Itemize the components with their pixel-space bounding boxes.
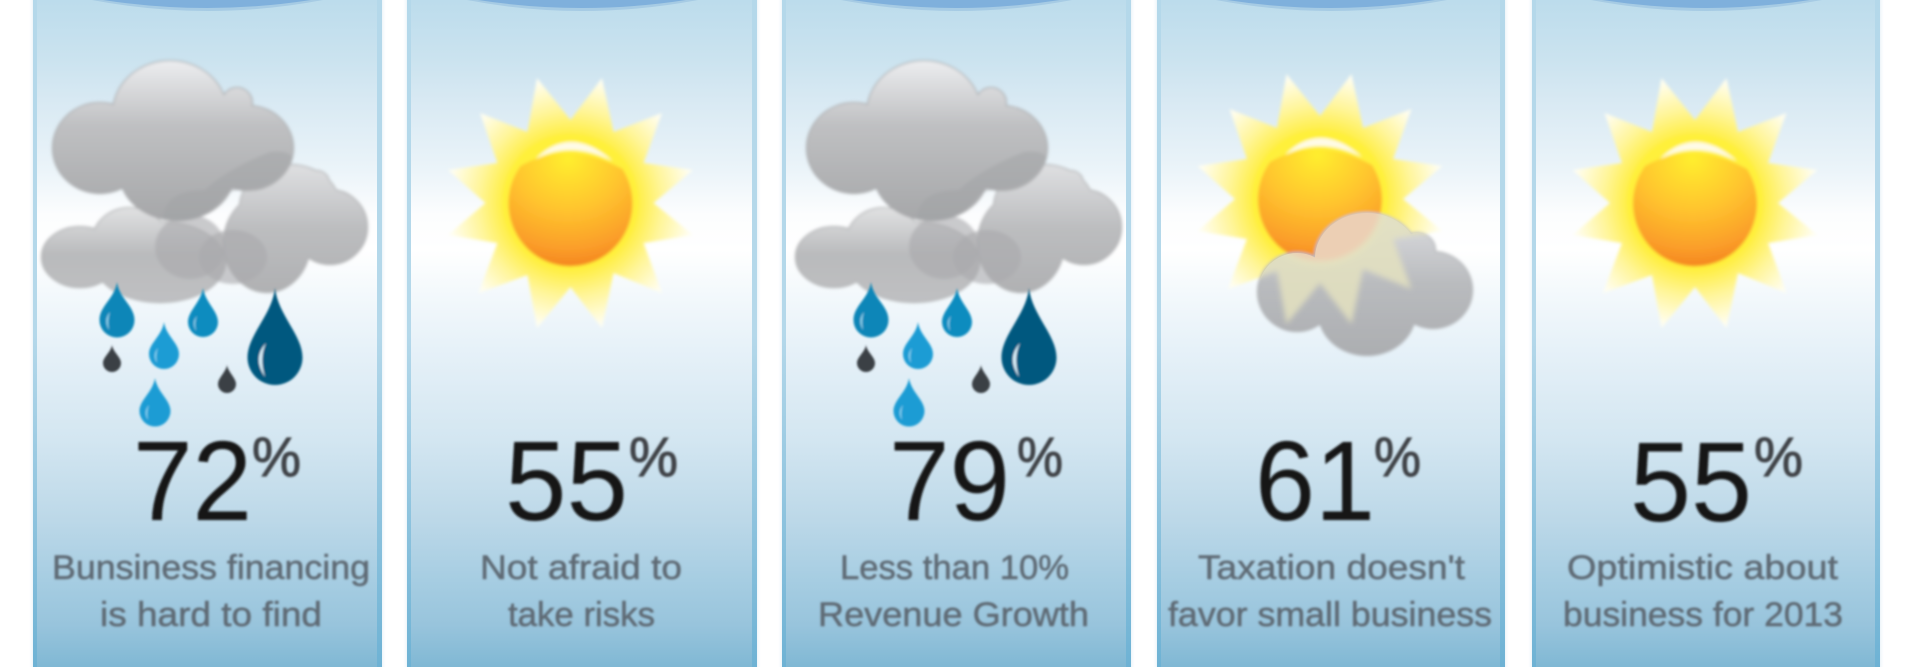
caption: Taxation doesn't	[1198, 549, 1466, 587]
figure: 72 percent: 72	[133, 418, 252, 544]
figure: 55 percent: 55	[1630, 419, 1752, 545]
figure: 55 percent: %	[1754, 425, 1803, 488]
figure: 55 percent: %	[629, 425, 678, 488]
figure: 55 percent: 55	[505, 418, 628, 544]
caption: is hard to find	[100, 596, 322, 634]
top arc	[1216, 0, 1447, 11]
caption	[1168, 549, 1492, 634]
caption: take risks	[508, 596, 655, 634]
icon: sun	[448, 78, 693, 328]
top arc	[841, 0, 1072, 11]
caption: Revenue Growth	[818, 596, 1089, 634]
caption: Bunsiness financing	[52, 549, 370, 587]
panel background	[1156, 0, 1506, 667]
caption	[818, 549, 1089, 634]
figure: 72 percent: %	[252, 425, 301, 488]
caption	[480, 549, 682, 634]
top arc	[1591, 0, 1822, 11]
caption: Optimistic about	[1567, 549, 1839, 587]
top arc	[92, 0, 323, 11]
panel: revenue growth	[781, 0, 1132, 667]
caption: business for 2013	[1563, 596, 1843, 634]
caption: favor small business	[1168, 596, 1492, 634]
icon: sun	[1572, 78, 1818, 328]
panel: taxation	[1156, 0, 1506, 667]
panel: business financing	[32, 0, 383, 667]
caption: Not afraid to	[480, 549, 682, 587]
panel background	[781, 0, 1132, 667]
top arc	[467, 0, 698, 11]
caption	[1563, 549, 1843, 634]
panel background	[406, 0, 758, 667]
icon: sun behind cloud	[1198, 74, 1472, 355]
panel: optimism	[1531, 0, 1881, 667]
icon: storm clouds with rain	[796, 61, 1121, 426]
figure: 61 percent: %	[1374, 425, 1421, 488]
panel background	[1531, 0, 1881, 667]
figure: 61 percent: 61	[1255, 418, 1375, 544]
caption: Less than 10%	[840, 549, 1069, 587]
figure: 79 percent: 79	[889, 418, 1010, 544]
icon: storm clouds with rain	[42, 61, 367, 426]
caption	[52, 549, 370, 634]
figure: 79 percent: %	[1017, 425, 1063, 488]
panel background	[32, 0, 383, 667]
panel: risk taking	[406, 0, 758, 667]
